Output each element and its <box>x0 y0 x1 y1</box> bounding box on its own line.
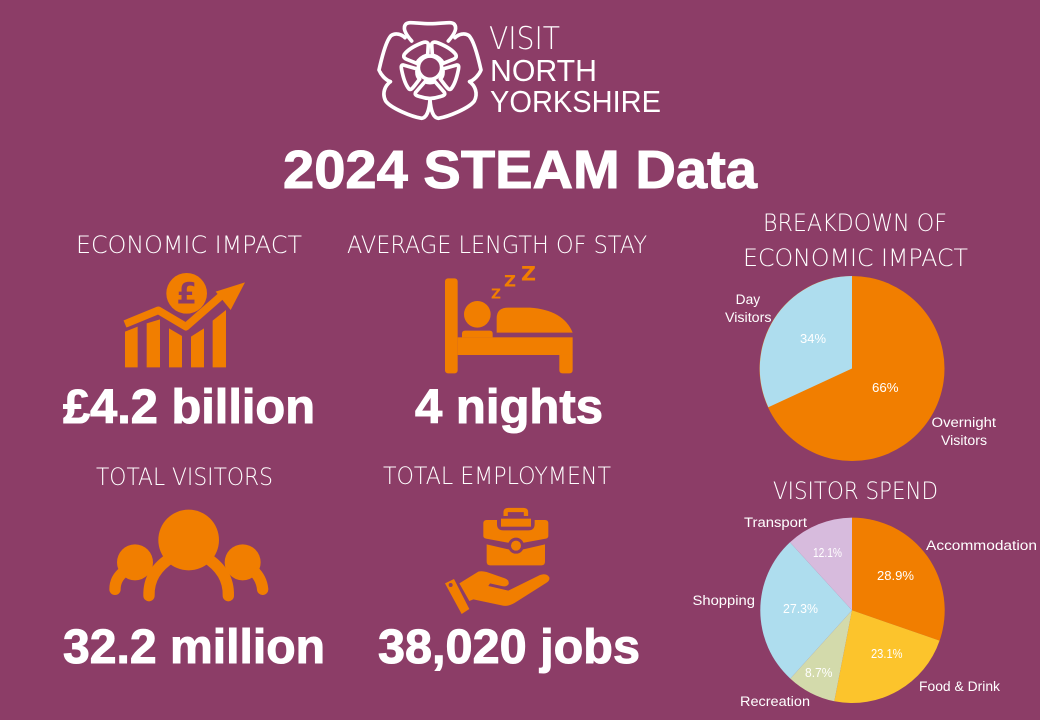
heading: breakdown of economic impact <box>743 209 968 272</box>
heading: breakdown of economic impact: BREAKDOWN OF <box>763 209 947 237</box>
icon: rose <box>379 23 481 118</box>
value: 4 nights: 4 nights <box>415 381 603 434</box>
icon: person sleeping in bed: Z <box>521 263 536 286</box>
value: 38,020 jobs: 38,020 jobs <box>378 621 640 674</box>
pie chart: visitor spend: 8.7% <box>805 665 833 680</box>
title: 2024 STEAM Data <box>283 140 758 200</box>
heading: breakdown of economic impact: ECONOMIC IMPACT <box>743 244 968 272</box>
pie chart: visitor spend: Transport <box>744 515 807 530</box>
pie chart: economic impact: Visitors <box>725 310 772 325</box>
pie chart: visitor spend: 27.3% <box>783 601 818 616</box>
value: 32.2 million: 32.2 million <box>63 621 325 674</box>
heading: economic impact: ECONOMIC IMPACT <box>76 231 302 259</box>
pie chart: visitor spend: 23.1% <box>871 646 903 661</box>
pie chart: economic impact: Overnight <box>932 415 996 430</box>
heading: average length of stay: AVERAGE LENGTH OF STAY <box>347 231 647 259</box>
logo text: YORKSHIRE: YORKSHIRE <box>490 84 661 119</box>
panel: total visitors <box>63 463 325 674</box>
icon: rising chart with pound coin: £ <box>176 277 197 311</box>
pie chart: visitor spend: 28.9% <box>877 568 914 583</box>
heading: total employment: TOTAL EMPLOYMENT <box>383 462 611 490</box>
panel: total employment <box>378 462 640 674</box>
pie chart: visitor spend <box>692 515 1037 709</box>
icon: three people <box>115 510 263 596</box>
pie chart: visitor spend: Shopping <box>692 593 755 608</box>
icon: rising chart with pound coin <box>125 273 245 367</box>
value: £4.2 billion: £4.2 billion <box>63 381 315 434</box>
panel: visitor spend <box>692 477 1037 709</box>
panel: average length of stay <box>347 231 647 434</box>
icon: briefcase over open hand <box>445 510 549 614</box>
logo: Visit North Yorkshire <box>379 21 661 119</box>
icon: person sleeping in bed <box>445 263 573 373</box>
pie chart: economic impact: 34% <box>800 331 826 346</box>
pie chart: visitor spend: Recreation <box>740 694 810 709</box>
heading: visitor spend: VISITOR SPEND <box>773 477 938 505</box>
pie chart: economic impact <box>725 276 996 461</box>
pie chart: economic impact: 66% <box>872 380 899 395</box>
icon: person sleeping in bed: Z <box>504 272 516 291</box>
heading: total visitors: TOTAL VISITORS <box>96 463 273 491</box>
pie chart: economic impact: Visitors <box>941 433 987 448</box>
panel: breakdown of economic impact <box>725 209 996 461</box>
panel: economic impact <box>63 231 315 434</box>
logo text: VISIT: VISIT <box>489 21 560 57</box>
pie chart: visitor spend: 12.1% <box>813 545 842 560</box>
pie chart: economic impact: Day <box>736 292 760 307</box>
icon: person sleeping in bed: Z <box>491 287 501 302</box>
logo text: NORTH: NORTH <box>490 53 597 88</box>
pie chart: visitor spend: Food & Drink <box>919 679 1000 694</box>
pie chart: visitor spend: Accommodation <box>926 538 1037 553</box>
